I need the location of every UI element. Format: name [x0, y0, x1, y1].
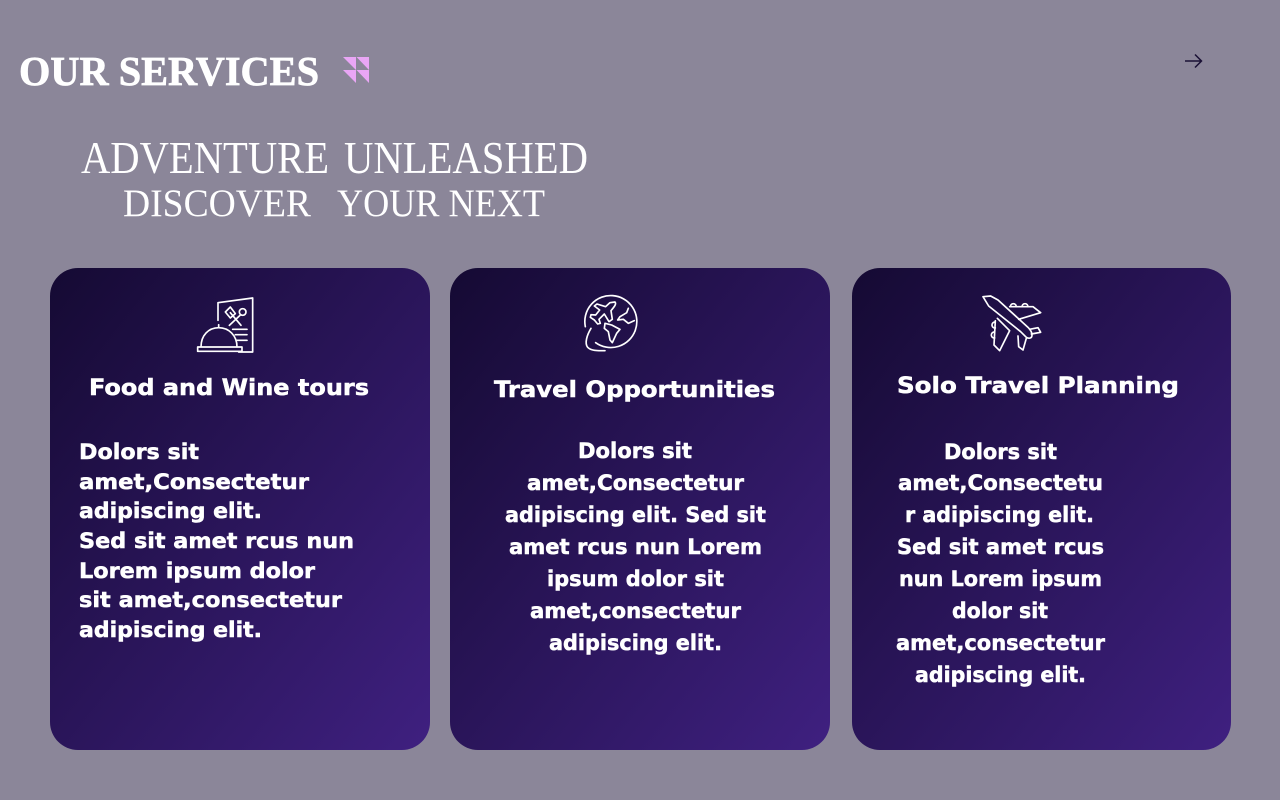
title: our services: OUR SERVICES: [19, 48, 319, 94]
heading: adventure unleashed: UNLEASHED: [344, 132, 588, 183]
card body text: dolor sit: [952, 599, 1048, 623]
panel: food and wine tours: [50, 268, 430, 750]
icon: airplane: [983, 296, 1041, 351]
card body text: Dolors sit: [79, 440, 199, 464]
card body text: adipiscing elit.: [79, 618, 262, 642]
heading: adventure unleashed: [81, 132, 588, 183]
card body text: Dolors sit: [944, 440, 1057, 464]
card title: Food and Wine tours: [89, 376, 369, 401]
icon: arrow: [1185, 54, 1202, 68]
card body text: [896, 440, 1106, 687]
heading: discover your next: DISCOVER: [123, 182, 311, 225]
icon: globe with plane: [585, 296, 637, 351]
card body text: amet,Consectetur: [79, 470, 310, 494]
heading: discover your next: YOUR NEXT: [337, 182, 545, 225]
card body text: amet,Consectetu: [898, 471, 1103, 495]
card body text: adipiscing elit. Sed sit: [505, 503, 766, 527]
card title: Travel Opportunities: [494, 378, 775, 403]
card body text: [505, 439, 766, 655]
card body text: sit amet,consectetur: [79, 588, 343, 612]
card body text: adipiscing elit.: [915, 663, 1086, 687]
card body text: amet,consectetur: [896, 631, 1106, 655]
card body text: [79, 440, 354, 642]
heading: adventure unleashed: ADVENTURE: [81, 132, 329, 183]
card body text: Lorem ipsum dolor: [79, 559, 316, 583]
heading: discover your next: [123, 182, 545, 225]
card body text: amet,Consectetur: [527, 471, 745, 495]
panel: solo travel planning: [852, 268, 1231, 750]
card body text: Dolors sit: [578, 439, 692, 463]
card body text: amet rcus nun Lorem: [509, 535, 762, 559]
icon: pink triangles: [343, 57, 369, 83]
card body text: ipsum dolor sit: [547, 567, 724, 591]
card body text: Sed sit amet rcus nun: [79, 529, 354, 553]
card body text: nun Lorem ipsum: [899, 567, 1102, 591]
card body text: r adipiscing elit.: [905, 503, 1094, 527]
card body text: adipiscing elit.: [549, 631, 722, 655]
icon: menu and cloche: [198, 298, 253, 352]
card title: Solo Travel Planning: [897, 374, 1179, 399]
panel: travel opportunities: [450, 268, 830, 750]
card body text: amet,consectetur: [530, 599, 742, 623]
card body text: Sed sit amet rcus: [897, 535, 1104, 559]
card body text: adipiscing elit.: [79, 499, 262, 523]
